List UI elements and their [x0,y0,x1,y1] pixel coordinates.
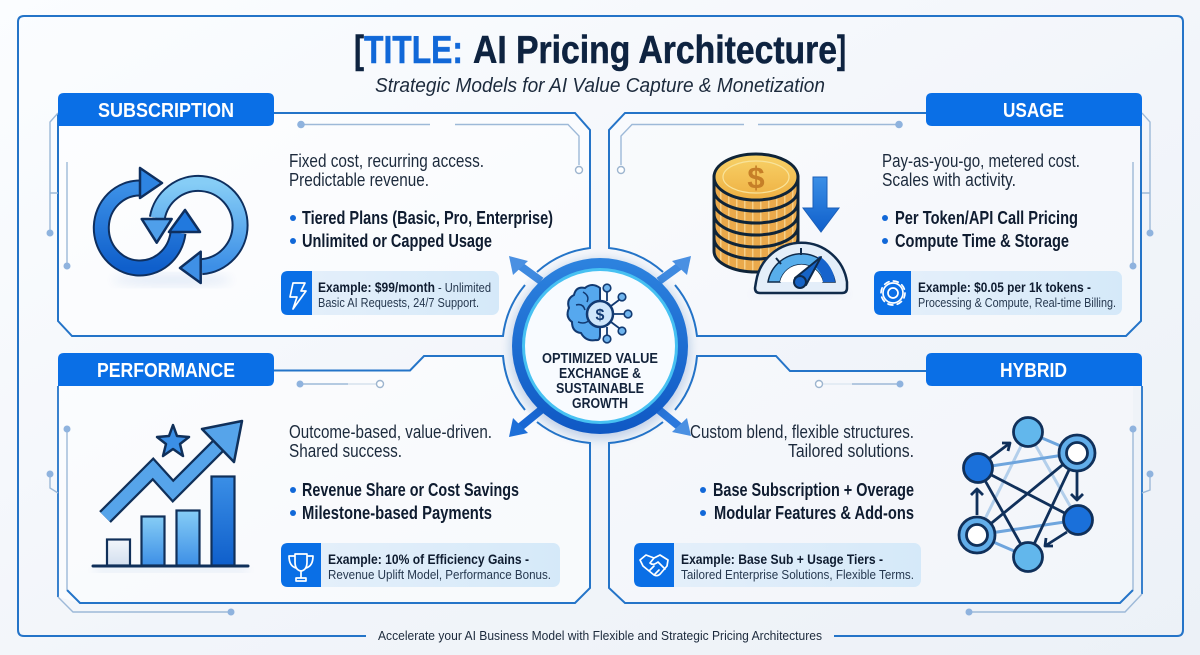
title: [ [354,29,364,72]
description: subscription: Fixed cost, recurring access. [289,151,484,171]
bullets: usage: Compute Time & Storage [895,231,1069,251]
title [354,29,846,72]
arrow: to subscription [509,256,541,281]
example box: performance: Example: 10% of Efficiency Gains - [328,552,529,567]
icon: recurring arrows [101,168,240,286]
description: performance [289,422,492,461]
heading: hybrid [926,353,1142,386]
example box: usage: Example: $0.05 per 1k tokens - [918,280,1091,295]
panel: performance [46,353,590,616]
example box: hybrid: Tailored Enterprise Solutions, Flexible Terms. [681,567,914,582]
bullets: performance [290,480,519,523]
description: usage: Pay-as-you-go, metered cost. [882,151,1080,171]
hub text: OPTIMIZED VALUE [542,351,658,367]
subtitle: Strategic Models for AI Value Capture & Monetization [375,75,825,97]
hub text [542,351,658,412]
icon: handshake [640,555,668,576]
arrow: to hybrid [659,410,691,436]
bullets: hybrid: Modular Features & Add-ons [714,503,914,523]
panel: subscription [46,93,590,336]
bullets: hybrid: Base Subscription + Overage [713,480,914,500]
example box: usage [874,271,1122,315]
heading: subscription: SUBSCRIPTION [98,100,234,122]
center hub [509,256,691,439]
bullets: performance: Revenue Share or Cost Savings [302,480,519,500]
example box: subscription: Basic AI Requests, 24/7 Support. [318,295,479,310]
example box: usage: Processing & Compute, Real-time Billing. [918,295,1116,310]
icon: coins and gauge [714,154,850,298]
heading: hybrid: HYBRID [1000,360,1067,382]
icon: growth chart [93,421,248,572]
example box: hybrid: Example: Base Sub + Usage Tiers - [681,552,883,567]
description: hybrid: Tailored solutions. [788,441,914,461]
panel: usage [609,93,1154,336]
bullets: performance: Milestone-based Payments [302,503,492,523]
description: subscription [289,151,484,190]
heading: performance [58,353,274,386]
icon: AI brain with dollar [568,284,632,343]
hub text: EXCHANGE & [559,366,641,382]
arrow: to usage [659,256,691,281]
description: subscription: Predictable revenue. [289,170,429,190]
icon: AI brain with dollar: $ [596,307,605,324]
heading: subscription [58,93,274,126]
heading: usage: USAGE [1003,100,1064,122]
title: AI Pricing Architecture [473,29,837,72]
description: usage: Scales with activity. [882,170,1016,190]
description: hybrid [690,422,914,461]
title: TITLE: [364,29,463,72]
example box: performance: Revenue Uplift Model, Performance Bonus. [328,567,551,582]
hub text: SUSTAINABLE [556,381,644,397]
icon: gear [881,281,905,305]
example box: subscription: Example: $99/month [318,280,435,295]
icon: lightning bolt [290,283,306,309]
description: performance: Shared success. [289,441,402,461]
example box: subscription [281,271,499,315]
description: hybrid: Custom blend, flexible structures. [690,422,914,442]
footer text: Accelerate your AI Business Model with Flexible and Strategic Pricing Architectures [378,629,822,643]
hub text: GROWTH [572,396,628,412]
example box: performance [281,543,560,587]
icon: coins and gauge: $ [747,160,765,195]
description: performance: Outcome-based, value-driven. [289,422,492,442]
panel: hybrid [609,353,1154,616]
bullets: subscription [290,208,553,251]
icon: network [959,418,1095,572]
bullets: subscription: Unlimited or Capped Usage [302,231,492,251]
icon: trophy [289,554,313,581]
arrow: to performance [509,410,541,437]
bullets: subscription: Tiered Plans (Basic, Pro, Enterprise) [302,208,553,228]
bullets: usage [882,208,1078,251]
description: usage [882,151,1080,190]
example box: subscription: - Unlimited [438,280,491,295]
bullets: hybrid [700,480,914,523]
heading: usage [926,93,1142,126]
heading: performance: PERFORMANCE [97,360,235,382]
title: ] [837,29,846,72]
bullets: usage: Per Token/API Call Pricing [895,208,1078,228]
example box: hybrid [634,543,921,587]
